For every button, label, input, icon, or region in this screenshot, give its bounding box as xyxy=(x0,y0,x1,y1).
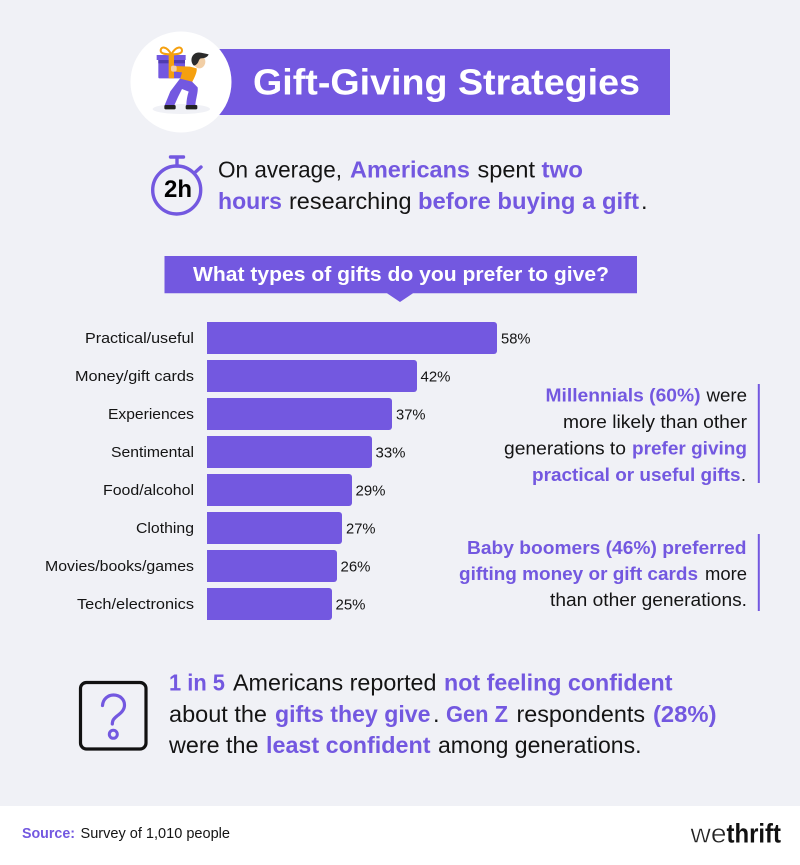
text: confidence finding: gifts they give xyxy=(275,701,430,727)
footer xyxy=(0,806,800,865)
callout: baby boomers: than other generations. xyxy=(550,590,747,610)
icon: question mark box xyxy=(80,682,146,749)
callout: millennials: generations to xyxy=(504,438,626,458)
bar: Money/gift cards 42% xyxy=(75,360,450,392)
bar: Practical/useful 58%: Practical/useful xyxy=(85,330,194,347)
text: confidence finding: Americans reported xyxy=(233,670,436,696)
text: average research time: spent xyxy=(478,156,535,182)
text: average research time: researching xyxy=(289,188,412,214)
bar: Movies/books/games 26% xyxy=(45,550,370,582)
text: average research time: On average, xyxy=(218,156,342,182)
callout: millennials: more likely than other xyxy=(563,412,747,432)
icon: person carrying gift xyxy=(130,32,232,132)
text: average research time: two xyxy=(542,156,583,182)
bar: Clothing 27% xyxy=(136,512,376,544)
bar: Tech/electronics 25% xyxy=(77,588,366,620)
text: average research time xyxy=(218,156,648,214)
callout: millennials: . xyxy=(741,465,746,485)
bar: Money/gift cards 42%: Money/gift cards xyxy=(75,368,194,385)
title: Gift-Giving Strategies xyxy=(253,62,640,102)
bar: Sentimental 33%: 33% xyxy=(376,444,406,462)
bar: Sentimental 33%: Sentimental xyxy=(111,444,194,461)
text: confidence finding: about the xyxy=(169,701,267,727)
bar: Clothing 27%: 27% xyxy=(346,520,376,538)
text: confidence finding: 1 in 5 xyxy=(169,670,225,696)
bar: Practical/useful 58% xyxy=(85,322,530,354)
text: average research time: before buying a gift xyxy=(418,188,639,214)
icon: stopwatch 2h xyxy=(153,157,201,214)
text: confidence finding: Gen Z xyxy=(446,701,508,727)
text: confidence finding: respondents xyxy=(516,701,645,727)
title banner xyxy=(200,49,670,115)
text: confidence finding xyxy=(168,670,717,758)
callout: baby boomers xyxy=(459,534,760,611)
bar: Experiences 37%: Experiences xyxy=(108,406,194,423)
logo: wethrift: we xyxy=(689,818,726,848)
source note: Survey of 1,010 people xyxy=(80,825,230,842)
icon: stopwatch 2h: 2h xyxy=(164,176,192,203)
callout: baby boomers: more xyxy=(705,564,747,584)
bar: Food/alcohol 29%: Food/alcohol xyxy=(103,482,194,499)
text: confidence finding: among generations. xyxy=(438,732,642,758)
callout: millennials: were xyxy=(705,386,747,406)
bar: Tech/electronics 25%: 25% xyxy=(336,596,366,614)
source note: Source: xyxy=(22,825,75,842)
bar: Sentimental 33% xyxy=(111,436,406,468)
bar: Movies/books/games 26%: Movies/books/games xyxy=(45,558,194,575)
text: average research time: . xyxy=(641,188,648,214)
callout: baby boomers: Baby boomers (46%) preferred xyxy=(467,538,746,558)
chart heading: What types of gifts do you prefer to give? xyxy=(193,263,609,286)
text: confidence finding: . xyxy=(433,701,440,727)
bar: Tech/electronics 25%: Tech/electronics xyxy=(77,596,194,613)
callout: millennials xyxy=(504,384,760,485)
callout: millennials: Millennials (60%) xyxy=(546,386,700,406)
logo: wethrift xyxy=(689,818,781,848)
bar: Experiences 37%: 37% xyxy=(396,406,426,424)
callout: baby boomers: gifting money or gift cards xyxy=(459,564,698,584)
bar: Experiences 37% xyxy=(108,398,426,430)
bar: Food/alcohol 29%: 29% xyxy=(356,482,386,500)
bar: Money/gift cards 42%: 42% xyxy=(420,368,450,386)
text: confidence finding: were the xyxy=(168,732,258,758)
bar: Practical/useful 58%: 58% xyxy=(501,330,530,348)
logo: wethrift: thrift xyxy=(726,818,781,848)
bar: Food/alcohol 29% xyxy=(103,474,386,506)
text: average research time: Americans xyxy=(350,156,470,182)
bar: Clothing 27%: Clothing xyxy=(136,520,194,537)
text: average research time: hours xyxy=(218,188,282,214)
callout: millennials: prefer giving xyxy=(632,438,747,458)
text: confidence finding: least confident xyxy=(266,732,431,758)
text: confidence finding: (28%) xyxy=(653,701,716,727)
bar chart xyxy=(45,322,530,620)
text: confidence finding: not feeling confident xyxy=(444,670,673,696)
chart heading xyxy=(164,256,637,302)
callout: millennials: practical or useful gifts xyxy=(532,465,740,485)
bar: Movies/books/games 26%: 26% xyxy=(340,558,370,576)
